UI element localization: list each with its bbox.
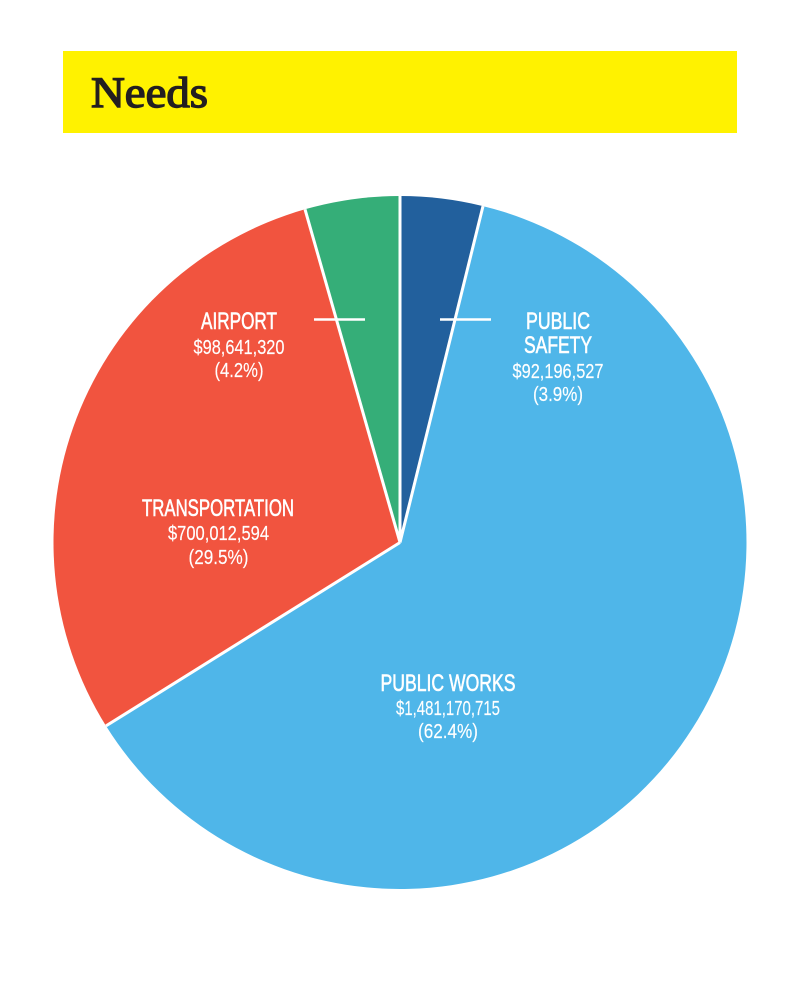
slice: public works xyxy=(106,206,746,889)
label: public safety: (3.9%) xyxy=(533,384,583,406)
title: Needs xyxy=(91,70,208,117)
label: transportation: TRANSPORTATION xyxy=(142,495,294,522)
slice: transportation xyxy=(53,209,400,726)
label: airport: AIRPORT xyxy=(201,308,277,335)
label: public works: PUBLIC WORKS xyxy=(380,670,516,697)
title banner xyxy=(63,51,737,133)
label: transportation: (29.5%) xyxy=(188,547,248,569)
label: public works: (62.4%) xyxy=(418,721,478,743)
label: airport: $98,641,320 xyxy=(194,337,284,359)
slice dividers xyxy=(106,196,483,726)
label: public safety: $92,196,527 xyxy=(512,361,604,383)
pie chart xyxy=(53,196,746,889)
label: public safety xyxy=(512,308,604,406)
label: airport xyxy=(194,308,284,382)
leader line: airport xyxy=(314,318,365,321)
label: public safety: SAFETY xyxy=(524,332,592,359)
slice: public safety xyxy=(400,196,483,542)
label: public works: $1,481,170,715 xyxy=(396,698,500,720)
label: public safety: PUBLIC xyxy=(526,308,590,335)
slice: airport xyxy=(305,196,400,542)
label: public works xyxy=(380,670,516,743)
leader line: public safety xyxy=(440,318,491,321)
label: transportation xyxy=(142,495,294,569)
label: transportation: $700,012,594 xyxy=(168,523,269,545)
label: airport: (4.2%) xyxy=(214,360,264,382)
